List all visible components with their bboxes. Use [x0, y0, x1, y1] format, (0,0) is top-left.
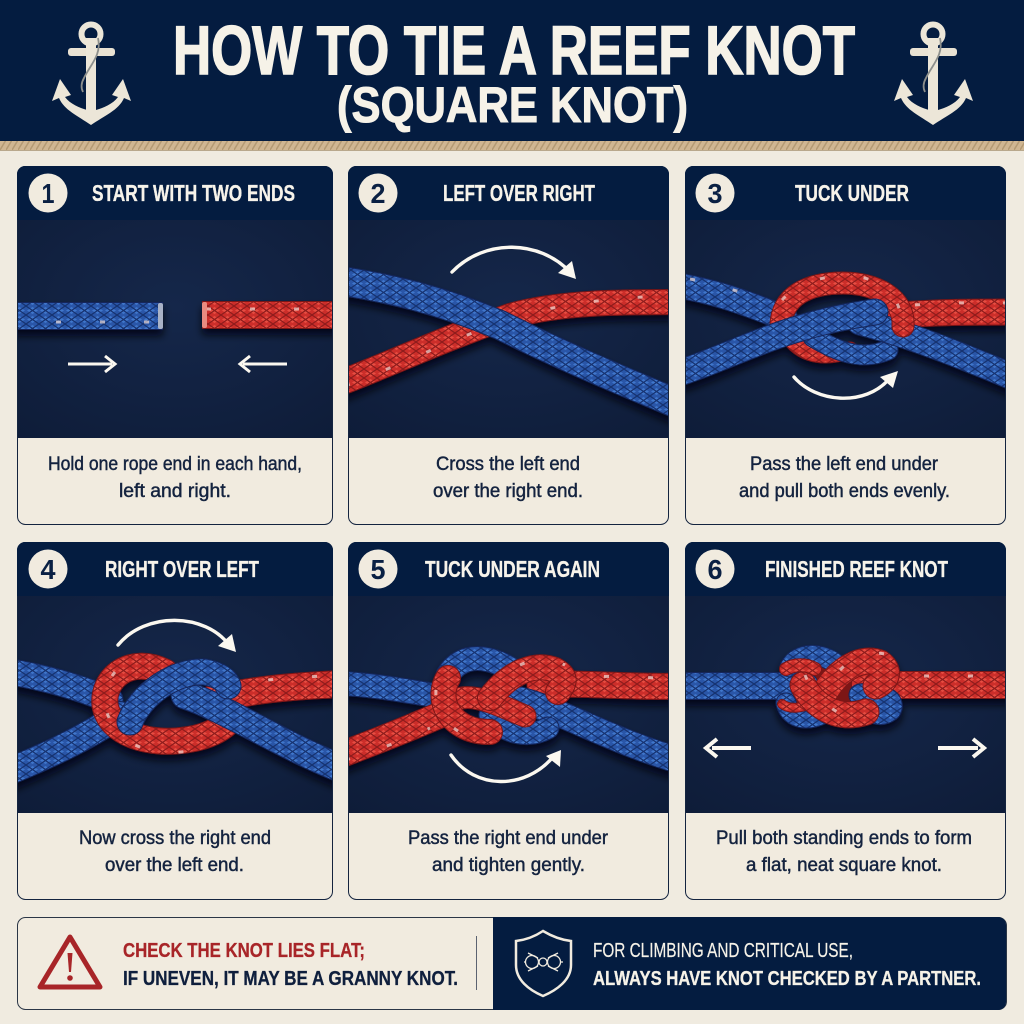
step 5 heading: TUCK UNDER AGAIN	[425, 556, 600, 582]
icon: right anchor	[894, 24, 973, 125]
step 4 caption: over the left end.	[105, 855, 244, 876]
step 6 number badge	[696, 550, 734, 588]
warning text: IF UNEVEN, IT MAY BE A GRANNY KNOT.	[123, 967, 458, 990]
subtitle: (SQUARE KNOT)	[337, 77, 688, 133]
safety text: FOR CLIMBING AND CRITICAL USE,	[593, 940, 853, 962]
step 1 heading: START WITH TWO ENDS	[92, 180, 295, 206]
step 4 number badge: 4	[40, 554, 56, 585]
step 1 number badge	[28, 174, 68, 212]
step 3 arrow	[794, 371, 898, 398]
step 6 ropes	[675, 653, 1020, 725]
step 1 number badge: 1	[42, 178, 54, 209]
panel: step 4	[0, 542, 345, 900]
step 5 number badge: 5	[370, 554, 386, 585]
step 5 caption: Pass the right end under	[408, 828, 609, 849]
step 6 number badge: 6	[708, 554, 722, 585]
step 3 caption: Pass the left end under	[750, 454, 939, 475]
safety text	[593, 940, 981, 990]
panel: warning and safety footer	[18, 917, 1006, 1010]
step 4 caption: Now cross the right end	[79, 828, 271, 849]
step 6 heading: FINISHED REEF KNOT	[765, 556, 948, 582]
panel: step 3	[670, 166, 1020, 524]
step 2 caption	[433, 454, 583, 502]
step 2 arrow	[452, 247, 576, 279]
step 4 heading: RIGHT OVER LEFT	[105, 556, 259, 582]
warning text: CHECK THE KNOT LIES FLAT;	[123, 939, 365, 962]
icon: warning triangle	[40, 937, 100, 987]
step 3 heading: TUCK UNDER	[795, 180, 909, 206]
step 4 arrow	[118, 620, 236, 652]
warning text	[123, 939, 458, 990]
step 2 number badge: 2	[370, 178, 386, 209]
step 2 caption: over the right end.	[433, 481, 583, 502]
step 1 caption: Hold one rope end in each hand,	[48, 454, 302, 475]
panel: step 5	[335, 542, 685, 900]
step 6 caption: a flat, neat square knot.	[746, 855, 942, 876]
icon: shield with knot	[516, 931, 571, 996]
step 5 arrow	[451, 750, 561, 782]
panel: step 1	[10, 166, 340, 524]
step 4 ropes	[0, 666, 345, 775]
step 3 number badge	[696, 174, 734, 212]
step 4 caption	[79, 828, 271, 876]
icon: left anchor	[52, 24, 131, 125]
step 6 caption: Pull both standing ends to form	[716, 828, 972, 849]
step 1 arrows	[68, 356, 287, 372]
step 5 ropes	[335, 658, 685, 762]
step 4 number badge	[28, 550, 68, 588]
step 1 caption: left and right.	[119, 481, 231, 502]
panel: step 2	[335, 166, 685, 524]
step 2 heading: LEFT OVER RIGHT	[443, 180, 595, 206]
step 1 caption	[48, 454, 302, 502]
step 3 caption	[739, 454, 950, 502]
step 6 arrows	[706, 739, 984, 757]
step 2 number badge	[358, 174, 398, 212]
step 3 caption: and pull both ends evenly.	[739, 481, 950, 502]
step 5 caption: and tighten gently.	[432, 855, 585, 876]
step 3 ropes	[670, 276, 1020, 380]
step 6 caption	[716, 828, 972, 876]
step 5 caption	[408, 828, 609, 876]
step 3 number badge: 3	[708, 178, 722, 209]
step 5 number badge	[358, 550, 398, 588]
step 1 ropes	[10, 302, 340, 329]
panel: step 6	[675, 542, 1020, 900]
step 2 ropes	[335, 280, 685, 407]
header banner	[0, 0, 1024, 151]
step 2 caption: Cross the left end	[436, 454, 580, 475]
